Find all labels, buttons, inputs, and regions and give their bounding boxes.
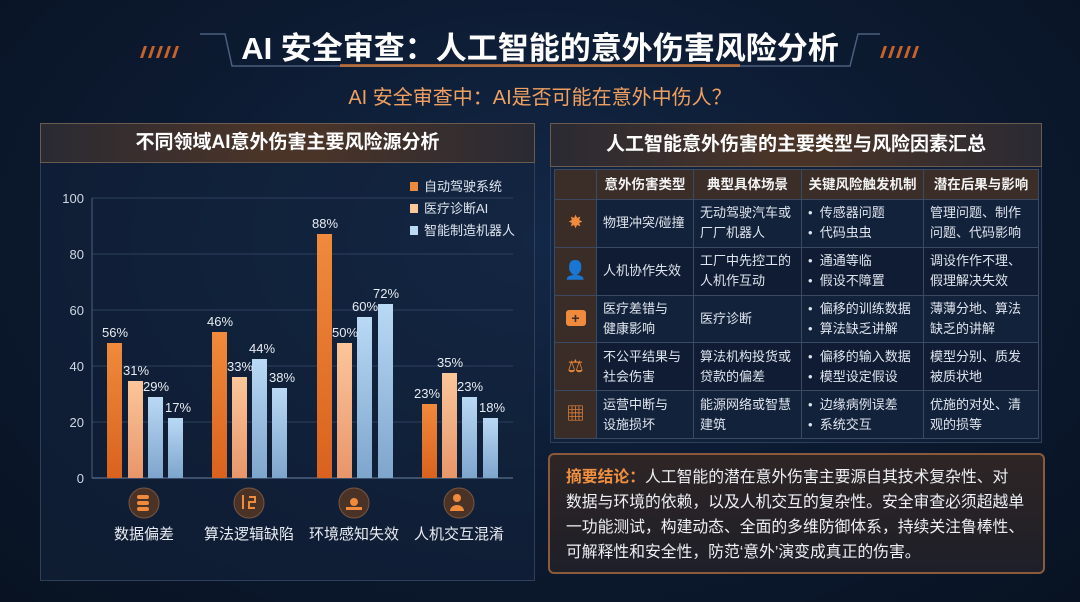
table: 意外伤害类型 bbox=[604, 176, 686, 192]
bar chart: 23% bbox=[457, 379, 483, 394]
heading: table panel bbox=[550, 123, 1042, 167]
table: 管理问题、制作问题、代码影响 bbox=[930, 205, 1021, 240]
legend bbox=[410, 179, 515, 238]
table: • 偏移的输入数据 bbox=[808, 349, 911, 364]
callout: summary conclusion: 一功能测试，构建动态、全面的多维防御体系，持续关注鲁棒性、 bbox=[566, 519, 1024, 536]
category icons and labels bbox=[114, 488, 504, 543]
bar chart: 80 bbox=[70, 247, 84, 262]
table: • 系统交互 bbox=[808, 417, 872, 432]
bar chart: 31% bbox=[123, 363, 149, 378]
icon: data bias bbox=[129, 488, 159, 518]
bar chart: 23% bbox=[414, 386, 440, 401]
bar chart: 56% bbox=[102, 325, 128, 340]
table bbox=[554, 169, 1039, 439]
table: 算法机构投货或贷款的偏差 bbox=[700, 349, 791, 384]
table: • 边缘病例误差 bbox=[808, 397, 898, 412]
table: ▦ bbox=[566, 404, 584, 424]
table: ✸ bbox=[568, 212, 583, 232]
table: + bbox=[571, 310, 580, 326]
table: 人机协作失效 bbox=[603, 263, 681, 278]
table: 不公平结果与 bbox=[603, 349, 681, 364]
heading: table panel: 人工智能意外伤害的主要类型与风险因素汇总 bbox=[606, 134, 986, 155]
table: 设施损坏 bbox=[603, 417, 655, 432]
table: 无动驾驶汽车或厂厂机器人 bbox=[700, 205, 791, 240]
icon: algorithm bbox=[234, 488, 264, 518]
table: 调设作作不理、假理解决失效 bbox=[930, 253, 1021, 288]
table: • 代码虫虫 bbox=[808, 225, 872, 240]
icon: human-machine bbox=[444, 488, 474, 518]
bar chart: 44% bbox=[249, 341, 275, 356]
bar chart bbox=[62, 179, 515, 486]
table: ⚖ bbox=[567, 356, 584, 376]
callout: summary conclusion: 数据与环境的依赖，以及人机交互的复杂性。安全审查必须超越单 bbox=[566, 494, 1024, 511]
table: 物理冲突/碰撞 bbox=[603, 215, 685, 230]
legend: 自动驾驶系统 bbox=[424, 179, 502, 194]
bar chart: 38% bbox=[269, 370, 295, 385]
callout: summary conclusion: 摘要结论：人工智能的潜在意外伤害主要源自其技术复杂性、对 bbox=[566, 469, 1008, 486]
bar chart: 18% bbox=[479, 400, 505, 415]
title: AI 安全审查：人工智能的意外伤害风险分析 bbox=[241, 31, 839, 66]
category icons and labels: 环境感知失效 bbox=[309, 526, 399, 543]
table: 能源网络或智慧建筑 bbox=[700, 397, 791, 432]
bar chart: 46% bbox=[207, 314, 233, 329]
icon: environment bbox=[339, 488, 369, 518]
bar chart: 33% bbox=[227, 359, 253, 374]
bar chart: 50% bbox=[332, 325, 358, 340]
bar chart: 29% bbox=[143, 379, 169, 394]
table: • 假设不障置 bbox=[808, 273, 885, 288]
category icons and labels: 人机交互混淆 bbox=[414, 526, 504, 543]
table: • 传感器问题 bbox=[808, 205, 885, 220]
table: • 算法缺乏讲解 bbox=[808, 321, 898, 336]
table: • 通通等临 bbox=[808, 253, 872, 268]
table: 医疗差错与 bbox=[603, 301, 668, 316]
bar chart: 17% bbox=[165, 400, 191, 415]
legend: 医疗诊断AI bbox=[424, 201, 488, 216]
bar chart: 60 bbox=[70, 303, 84, 318]
bar chart: 35% bbox=[437, 355, 463, 370]
table: 医疗诊断 bbox=[700, 311, 752, 326]
heading: chart panel bbox=[40, 123, 535, 163]
table: 模型分别、质发被质状地 bbox=[930, 349, 1021, 384]
table: • 模型设定假设 bbox=[808, 369, 898, 384]
table: 优施的对处、清观的损等 bbox=[930, 397, 1021, 432]
table: 运营中断与 bbox=[603, 397, 668, 412]
table: 健康影响 bbox=[603, 321, 655, 336]
bar chart: 72% bbox=[373, 286, 399, 301]
bar chart: 0 bbox=[77, 471, 84, 486]
bar chart: 40 bbox=[70, 359, 84, 374]
table: 👤 bbox=[564, 260, 587, 280]
table: 薄薄分地、算法缺乏的讲解 bbox=[930, 301, 1021, 336]
category icons and labels: 数据偏差 bbox=[114, 526, 174, 543]
subtitle: AI 安全审查中：AI是否可能在意外中伤人？ bbox=[348, 87, 732, 109]
table: 关键风险触发机制 bbox=[808, 176, 916, 192]
callout: summary conclusion: 可解释性和安全性，防范‘意外’演变成真正的伤害。 bbox=[566, 544, 921, 561]
bar chart: 100 bbox=[62, 191, 84, 206]
callout: summary conclusion bbox=[548, 453, 1045, 574]
table: 社会伤害 bbox=[603, 369, 655, 384]
table: 典型具体场景 bbox=[707, 176, 788, 192]
category icons and labels: 算法逻辑缺陷 bbox=[204, 526, 294, 543]
heading: chart panel: 不同领域AI意外伤害主要风险源分析 bbox=[135, 132, 440, 153]
panel: right table bbox=[550, 123, 1042, 443]
table: • 偏移的训练数据 bbox=[808, 301, 911, 316]
table: 潜在后果与影响 bbox=[934, 176, 1028, 192]
bar chart: 60% bbox=[352, 299, 378, 314]
bar chart: 88% bbox=[312, 216, 338, 231]
panel: left chart bbox=[40, 123, 535, 581]
table: 工厂中先控工的人机作互动 bbox=[700, 253, 791, 288]
legend: 智能制造机器人 bbox=[424, 223, 515, 238]
bar chart: 20 bbox=[70, 415, 84, 430]
